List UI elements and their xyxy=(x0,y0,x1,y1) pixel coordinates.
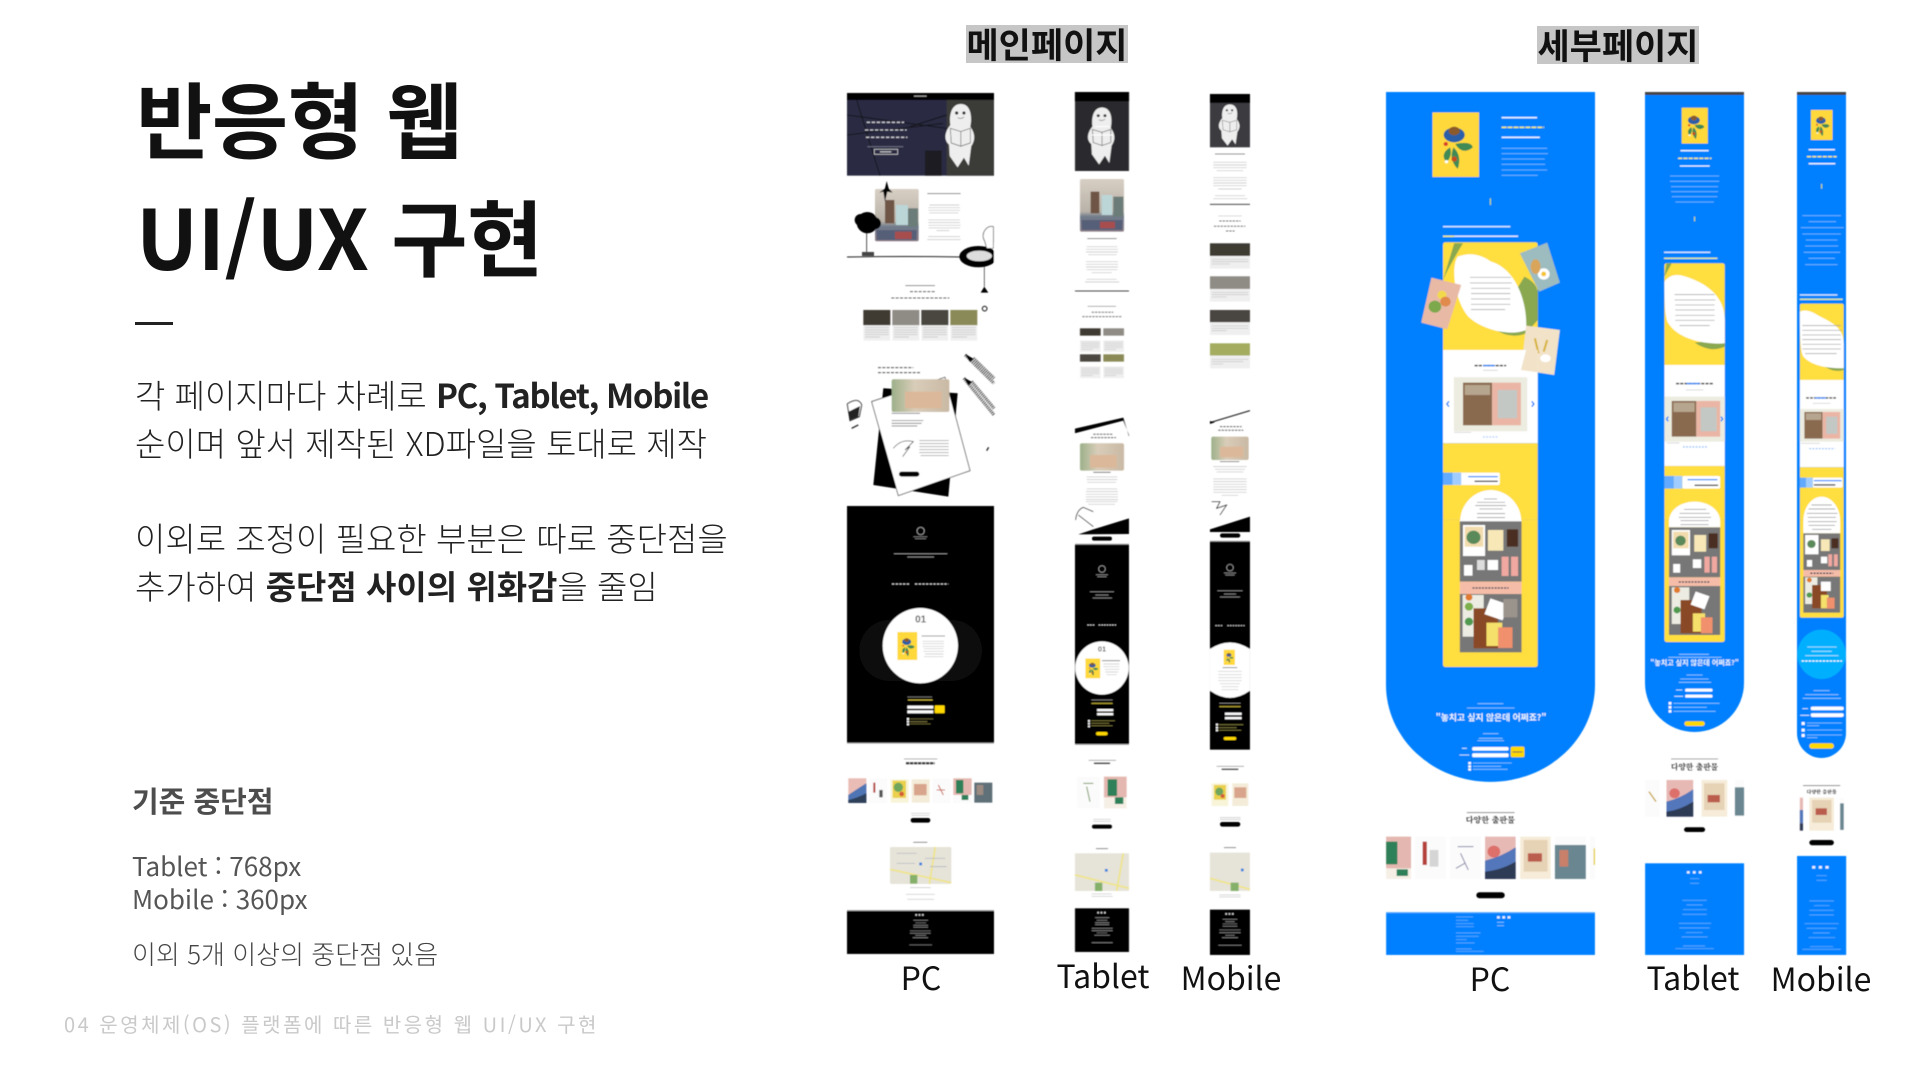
label: detail Mobile: Mobile xyxy=(1771,955,1871,1001)
footer Tablet detail xyxy=(1645,863,1744,955)
heading: breakpoints: 기준 중단점 xyxy=(132,779,274,821)
gallery PC xyxy=(848,759,992,823)
mockup: detail Tablet lower xyxy=(1645,520,1744,955)
paper bottom Mobile xyxy=(1210,502,1250,538)
community Tablet: 01 xyxy=(1098,645,1106,654)
hero Mobile xyxy=(1210,94,1250,147)
gallery Mobile detail xyxy=(1800,786,1844,845)
text block: description 2 xyxy=(135,513,728,609)
yellow shop panel bottom PC xyxy=(1443,520,1538,667)
callout and form Tablet: "놓치고 싶지 않은데 어쩌죠?" xyxy=(1650,657,1739,667)
callout text and form PC xyxy=(1436,704,1546,771)
text block: breakpoint note: 이외 5개 이상의 중단점 있음 xyxy=(132,935,438,972)
gallery Mobile detail: 다양한 출판물 xyxy=(1807,788,1837,795)
heading: main page: 메인페이지 xyxy=(966,18,1128,69)
panel: detail page mockups xyxy=(1386,92,1846,955)
footer PC xyxy=(847,910,994,954)
cards Mobile xyxy=(1210,243,1250,368)
mockup: main page Tablet upper xyxy=(1075,92,1129,500)
callout text and form PC: "놓치고 싶지 않은데 어쩌죠?" xyxy=(1436,712,1546,723)
title: 반응형 웹 xyxy=(136,56,462,176)
label: main Tablet: Tablet xyxy=(1057,952,1149,998)
text block: breakpoint values: Mobile : 360px xyxy=(132,880,308,917)
mockup: detail Tablet upper xyxy=(1664,108,1725,521)
text block: description 2: 추가하여 중단점 사이의 위화감을 줄임 xyxy=(135,561,658,609)
hero Tablet xyxy=(1075,92,1129,171)
mockup: main page PC upper xyxy=(847,93,1001,497)
footer PC detail xyxy=(1386,912,1595,955)
shop panel top Tablet xyxy=(1664,466,1725,521)
footer Mobile detail xyxy=(1797,856,1846,955)
label: detail Tablet: Tablet xyxy=(1647,954,1739,1000)
mockup: main page Mobile upper xyxy=(1210,94,1250,495)
blue background Mobile xyxy=(1797,92,1846,758)
preview Tablet xyxy=(1664,365,1725,466)
footer caption: 04 운영체제(OS) 플랫폼에 따른 반응형 웹 UI/UX 구현 xyxy=(64,1009,599,1038)
gallery Tablet detail: 다양한 출판물 xyxy=(1671,762,1719,772)
community Mobile xyxy=(1210,541,1250,750)
preview Mobile xyxy=(1800,380,1844,467)
lemon panel Tablet xyxy=(1664,252,1725,365)
label: main PC: PC xyxy=(901,954,941,1000)
footer Tablet xyxy=(1075,908,1129,952)
text block: description 1: 각 페이지마다 차례로 PC, Tablet, Mobile xyxy=(135,370,708,418)
gallery PC detail: 다양한 출판물 xyxy=(1466,815,1515,826)
label: detail PC: PC xyxy=(1470,955,1510,1001)
text block: description 2: 이외로 조정이 필요한 부분은 따로 중단점을 xyxy=(135,513,728,561)
heading: detail page: 세부페이지 xyxy=(1537,19,1698,70)
divider dash xyxy=(135,322,173,325)
intro Tablet xyxy=(1670,108,1719,221)
callout and form Tablet xyxy=(1650,654,1739,726)
gallery Tablet xyxy=(1077,760,1127,829)
gallery Tablet detail xyxy=(1645,759,1744,832)
paper Tablet xyxy=(1075,418,1129,500)
about Tablet xyxy=(1075,179,1129,291)
title: UI/UX 구현 xyxy=(136,174,543,294)
label: main Mobile: Mobile xyxy=(1181,954,1281,1000)
hero PC xyxy=(847,93,994,176)
cards Tablet xyxy=(1080,306,1124,378)
about section PC xyxy=(847,181,1001,311)
shop panel bottom Mobile xyxy=(1800,520,1844,618)
detail top bars xyxy=(1645,92,1846,95)
yellow shop panel top PC xyxy=(1443,443,1538,521)
about Mobile xyxy=(1210,154,1250,231)
light blue callout circle Mobile xyxy=(1797,630,1846,679)
community black section PC: 01 xyxy=(915,615,927,626)
shop panel bottom Tablet xyxy=(1664,520,1725,642)
panel: main page mockups xyxy=(847,92,1250,955)
yellow lemon panel PC xyxy=(1421,227,1560,375)
mockup: main page Tablet lower xyxy=(1075,502,1129,952)
book and intro PC xyxy=(1432,112,1548,205)
text block: breakpoint values xyxy=(132,847,308,917)
footer Mobile xyxy=(1210,910,1250,955)
lemon panel Mobile xyxy=(1800,295,1844,380)
paper Mobile xyxy=(1210,411,1250,495)
community Tablet xyxy=(1075,544,1129,745)
paper section PC xyxy=(847,354,994,497)
map PC xyxy=(890,842,951,899)
gallery PC detail xyxy=(1386,813,1595,898)
form Mobile xyxy=(1800,691,1844,749)
mockup: detail PC upper xyxy=(1421,112,1560,521)
intro Mobile xyxy=(1801,110,1844,265)
preview white section PC xyxy=(1443,350,1538,443)
gallery Mobile xyxy=(1212,766,1248,827)
map Tablet xyxy=(1075,849,1129,896)
mockup: detail Mobile upper xyxy=(1800,110,1844,521)
shop panel top Mobile xyxy=(1800,467,1844,521)
mockup: main page PC lower xyxy=(847,506,994,954)
map Mobile xyxy=(1210,848,1250,897)
cards section PC xyxy=(863,286,977,341)
title xyxy=(136,56,543,294)
blue background PC xyxy=(1386,92,1595,782)
community black section PC xyxy=(847,506,994,744)
text block: breakpoint values: Tablet : 768px xyxy=(132,847,301,884)
paper bottom Tablet xyxy=(1075,502,1129,541)
mockup: main page Mobile lower xyxy=(1210,502,1250,955)
mockup: detail PC lower xyxy=(1386,520,1595,955)
text block: description 1: 순이며 앞서 제작된 XD파일을 토대로 제작 xyxy=(135,418,707,466)
mockup: detail Mobile lower xyxy=(1797,520,1846,955)
text block: description 1 xyxy=(135,370,708,466)
blue background Tablet xyxy=(1645,92,1744,732)
